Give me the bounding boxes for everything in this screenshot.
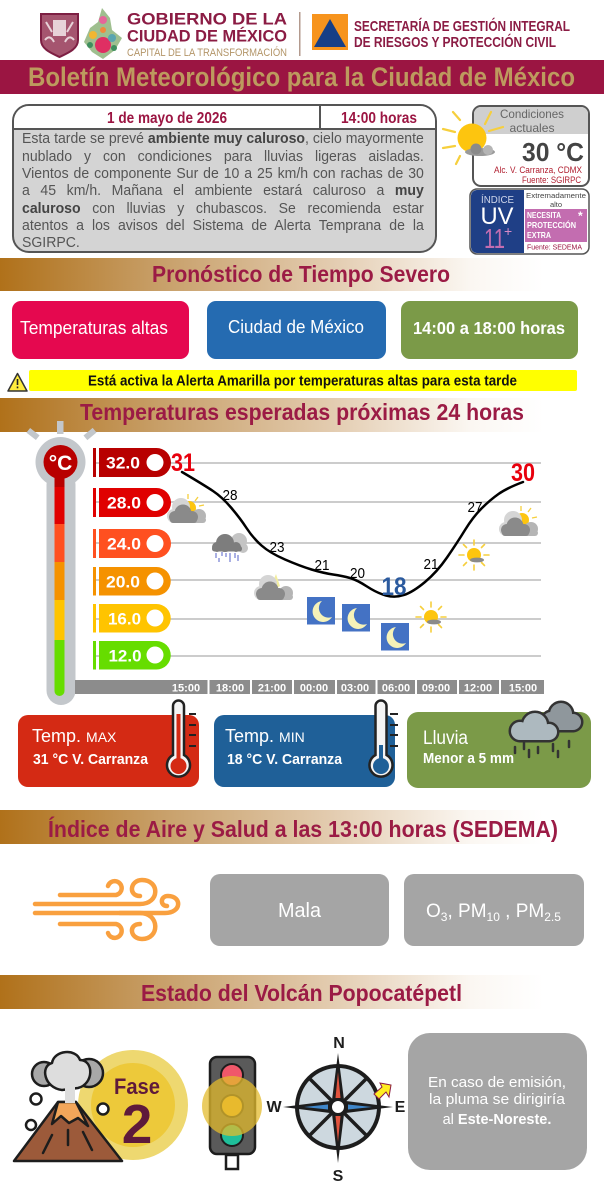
chart: temperature forecast	[26, 421, 544, 705]
panel: current conditions	[473, 106, 589, 186]
heading: Temperaturas esperadas: Temperaturas esperadas próximas 24 horas	[80, 399, 524, 425]
panel: UV index: ÍNDICE	[481, 193, 514, 206]
icon: sun 12:00	[459, 540, 489, 570]
temperature values: 27	[468, 499, 482, 516]
alert bar: Está activa la Alerta Amarilla por temperaturas altas para esta tarde	[88, 374, 517, 390]
icon: sun 09:00	[416, 602, 446, 632]
text block: forecast description: caluroso con lluvias y chubascos. Se recomienda estar	[22, 201, 424, 217]
panel: UV index: +	[504, 223, 512, 239]
panel: current conditions: Alc. V. Carranza, CDMX	[494, 165, 582, 175]
legend pill 12: 12.0	[108, 646, 142, 666]
time axis: 12:00	[464, 682, 492, 694]
temperature values: 30	[511, 459, 535, 487]
icon: compass: N	[333, 1035, 345, 1052]
panel: UV index: 11	[484, 223, 505, 254]
panel: maximum temperature	[18, 701, 199, 787]
panel: severe phenomenon: Temperaturas altas	[20, 318, 168, 338]
icon: traffic light	[202, 1057, 262, 1169]
logo: Gobierno de la Ciudad de México shield	[41, 14, 78, 57]
panel: UV index: Fuente: SEDEMA	[527, 242, 582, 252]
icon: compass: W	[266, 1099, 282, 1116]
icon: rain cloud	[212, 533, 248, 562]
icon: blue thermometer	[370, 701, 398, 777]
temperature values: 21	[314, 557, 330, 574]
panel: forecast text frame	[13, 105, 436, 252]
legend pill 16: 16.0	[108, 610, 141, 628]
heading: Índice de Aire y Salud	[0, 810, 604, 844]
icon: partly cloudy 15:00	[499, 506, 538, 536]
panel: UV index	[470, 189, 589, 254]
panel: air quality	[210, 874, 389, 946]
temperature values: 21	[424, 556, 438, 573]
panel: minimum temperature: Temp. MIN	[225, 726, 305, 746]
heading: Estado del Volcán Popocatépetl: Estado del Volcán Popocatépetl	[141, 980, 462, 1006]
heading: Pronóstico de Tiempo Severo	[0, 258, 604, 291]
temperature curve	[182, 472, 523, 597]
panel: forecast text frame: 14:00 horas	[341, 110, 417, 127]
legend pill 20: 20.0	[106, 572, 140, 592]
panel: location	[207, 301, 386, 359]
icon: volcano	[14, 1052, 122, 1161]
temperature values	[171, 449, 535, 601]
panel: current conditions: 30 °C	[522, 137, 584, 167]
panel: severe phenomenon	[12, 301, 189, 359]
icon: wind	[35, 880, 178, 939]
panel: UV index: *	[578, 209, 583, 223]
panel: forecast text frame: 1 de mayo de 2026	[107, 110, 227, 127]
icon: red thermometer	[167, 701, 196, 777]
logo text: Gobierno de la Ciudad de México: CAPITAL DE LA TRANSFORMACIÓN	[127, 46, 287, 59]
time axis	[75, 680, 544, 694]
panel: pollutants: , PM	[447, 901, 487, 922]
text block: forecast description: nublado y con condiciones para lluvias ligeras aisladas.	[22, 149, 424, 165]
logo text: Secretaría de Gestión Integral	[354, 17, 570, 51]
text block: forecast description: atentos a los avisos del Sistema de Alerta Temprana de la	[22, 218, 424, 234]
time axis: 18:00	[216, 682, 244, 694]
panel: plume direction: al Este-Noreste.	[443, 1112, 551, 1128]
panel: current conditions: Fuente: SGIRPC	[522, 175, 581, 185]
panel: time window: 14:00 a 18:00 horas	[413, 318, 565, 338]
heading: Temperaturas esperadas	[0, 398, 604, 432]
logo text: Gobierno de la Ciudad de México: CIUDAD DE MÉXICO	[127, 26, 287, 46]
panel: plume direction: la pluma se dirigiría	[429, 1092, 566, 1108]
time axis: 06:00	[382, 682, 410, 694]
legend pill 24: 24.0	[107, 534, 141, 554]
logo text: Gobierno de la Ciudad de México: GOBIERNO DE LA	[127, 10, 287, 28]
time axis: 15:00	[509, 682, 537, 694]
panel: pollutants	[404, 874, 584, 946]
icon: night cloud	[254, 574, 293, 600]
panel: rainfall	[407, 703, 591, 788]
temperature values: 20	[350, 565, 365, 582]
panel: pollutants: 2.5	[544, 910, 561, 924]
panel: maximum temperature: 31 °C V. Carranza	[33, 751, 149, 768]
legend pill 12	[93, 641, 171, 670]
text block: forecast description	[22, 131, 424, 251]
icon: rain clouds	[511, 703, 581, 757]
panel: time window	[401, 301, 578, 359]
panel: minimum temperature	[214, 701, 398, 787]
text block: forecast description: Esta tarde se prevé ambiente muy caluroso, cielo mayormente	[22, 131, 424, 147]
temperature values: 23	[270, 539, 284, 556]
heading: Estado del Volcán Popocatépetl	[0, 975, 604, 1009]
legend pill 32: 32.0	[106, 454, 140, 472]
time axis: 03:00	[341, 682, 369, 694]
panel: plume direction: En caso de emisión,	[428, 1075, 566, 1091]
icon: moon 00:00	[307, 597, 335, 624]
text block: forecast description: a 45 km/h. Mañana el ambiente estará caluroso a muy	[22, 183, 424, 199]
legend pill 16	[93, 604, 171, 632]
logo text: Gobierno de la Ciudad de México	[127, 10, 287, 59]
icon: plume direction arrow	[374, 1083, 391, 1099]
panel: UV index: EXTRA	[527, 230, 551, 240]
panel: current conditions: Condiciones	[500, 107, 564, 121]
temperature values: 28	[222, 487, 238, 504]
icon: phase 2 badge: 2	[122, 1093, 152, 1155]
icon: moon 06:00	[381, 623, 409, 650]
panel: pollutants: 10	[487, 910, 500, 924]
icon: compass: S	[333, 1168, 344, 1185]
panel: UV index: UV	[480, 203, 514, 230]
alert bar	[29, 370, 577, 391]
logo: colourful map of Mexico City	[84, 8, 122, 59]
panel: location: Ciudad de México	[228, 317, 364, 337]
legend pill 24	[93, 529, 171, 558]
panel: pollutants: O	[426, 901, 441, 922]
legend pill 28: 28.0	[107, 494, 141, 512]
panel: maximum temperature: Temp. MAX	[32, 726, 117, 746]
icon: compass	[266, 1035, 406, 1185]
legend pill 20	[93, 567, 171, 596]
text block: forecast description: Vientos de componente Sur de 10 a 25 km/h con rachas de 30	[22, 166, 424, 182]
panel: pollutants: , PM	[500, 901, 544, 922]
panel: UV index: Extremadamente	[526, 191, 586, 200]
thermometer scale: °C	[49, 452, 72, 475]
logo text: Secretaría de Gestión Integral: DE RIESGOS Y PROTECCIÓN CIVIL	[354, 33, 556, 51]
panel: rainfall: Menor a 5 mm	[423, 751, 514, 767]
logo: civil protection triangle	[312, 14, 348, 50]
icon: warning triangle	[8, 374, 27, 391]
time axis: 15:00	[172, 682, 200, 694]
heading: Pronóstico de Tiempo Severo: Pronóstico de Tiempo Severo	[152, 261, 450, 287]
icon: compass: E	[395, 1099, 406, 1116]
temperature values: 31	[171, 449, 195, 477]
icon: phase 2 badge: Fase	[114, 1074, 160, 1099]
panel: pollutants: 3	[441, 910, 448, 924]
legend pill 28	[93, 488, 171, 517]
panel: UV index: PROTECCIÓN	[527, 219, 576, 230]
time axis: 00:00	[300, 682, 328, 694]
time axis: 09:00	[422, 682, 450, 694]
panel: current conditions: actuales	[510, 121, 554, 135]
icon: phase 2 badge	[78, 1050, 188, 1160]
panel: plume direction	[408, 1033, 587, 1170]
thermometer scale	[26, 421, 97, 705]
legend pill 32	[93, 448, 171, 477]
heading: Índice de Aire y Salud: Índice de Aire y Salud a las 13:00 horas (SEDEMA)	[48, 815, 558, 842]
text block: forecast description: SGIRPC.	[22, 235, 80, 251]
panel: rainfall: Lluvia	[423, 728, 468, 749]
icon: sun with small cloud	[443, 112, 503, 164]
time axis: 21:00	[258, 682, 286, 694]
temperature values: 18	[382, 573, 407, 601]
icon: partly cloudy 18:00	[167, 494, 206, 523]
icon: moon 03:00	[342, 604, 370, 632]
panel: UV index: alto	[550, 200, 562, 209]
panel: air quality: Mala	[278, 900, 322, 922]
panel: minimum temperature: 18 °C V. Carranza	[227, 751, 343, 768]
panel: UV index: NECESITA	[527, 210, 561, 220]
